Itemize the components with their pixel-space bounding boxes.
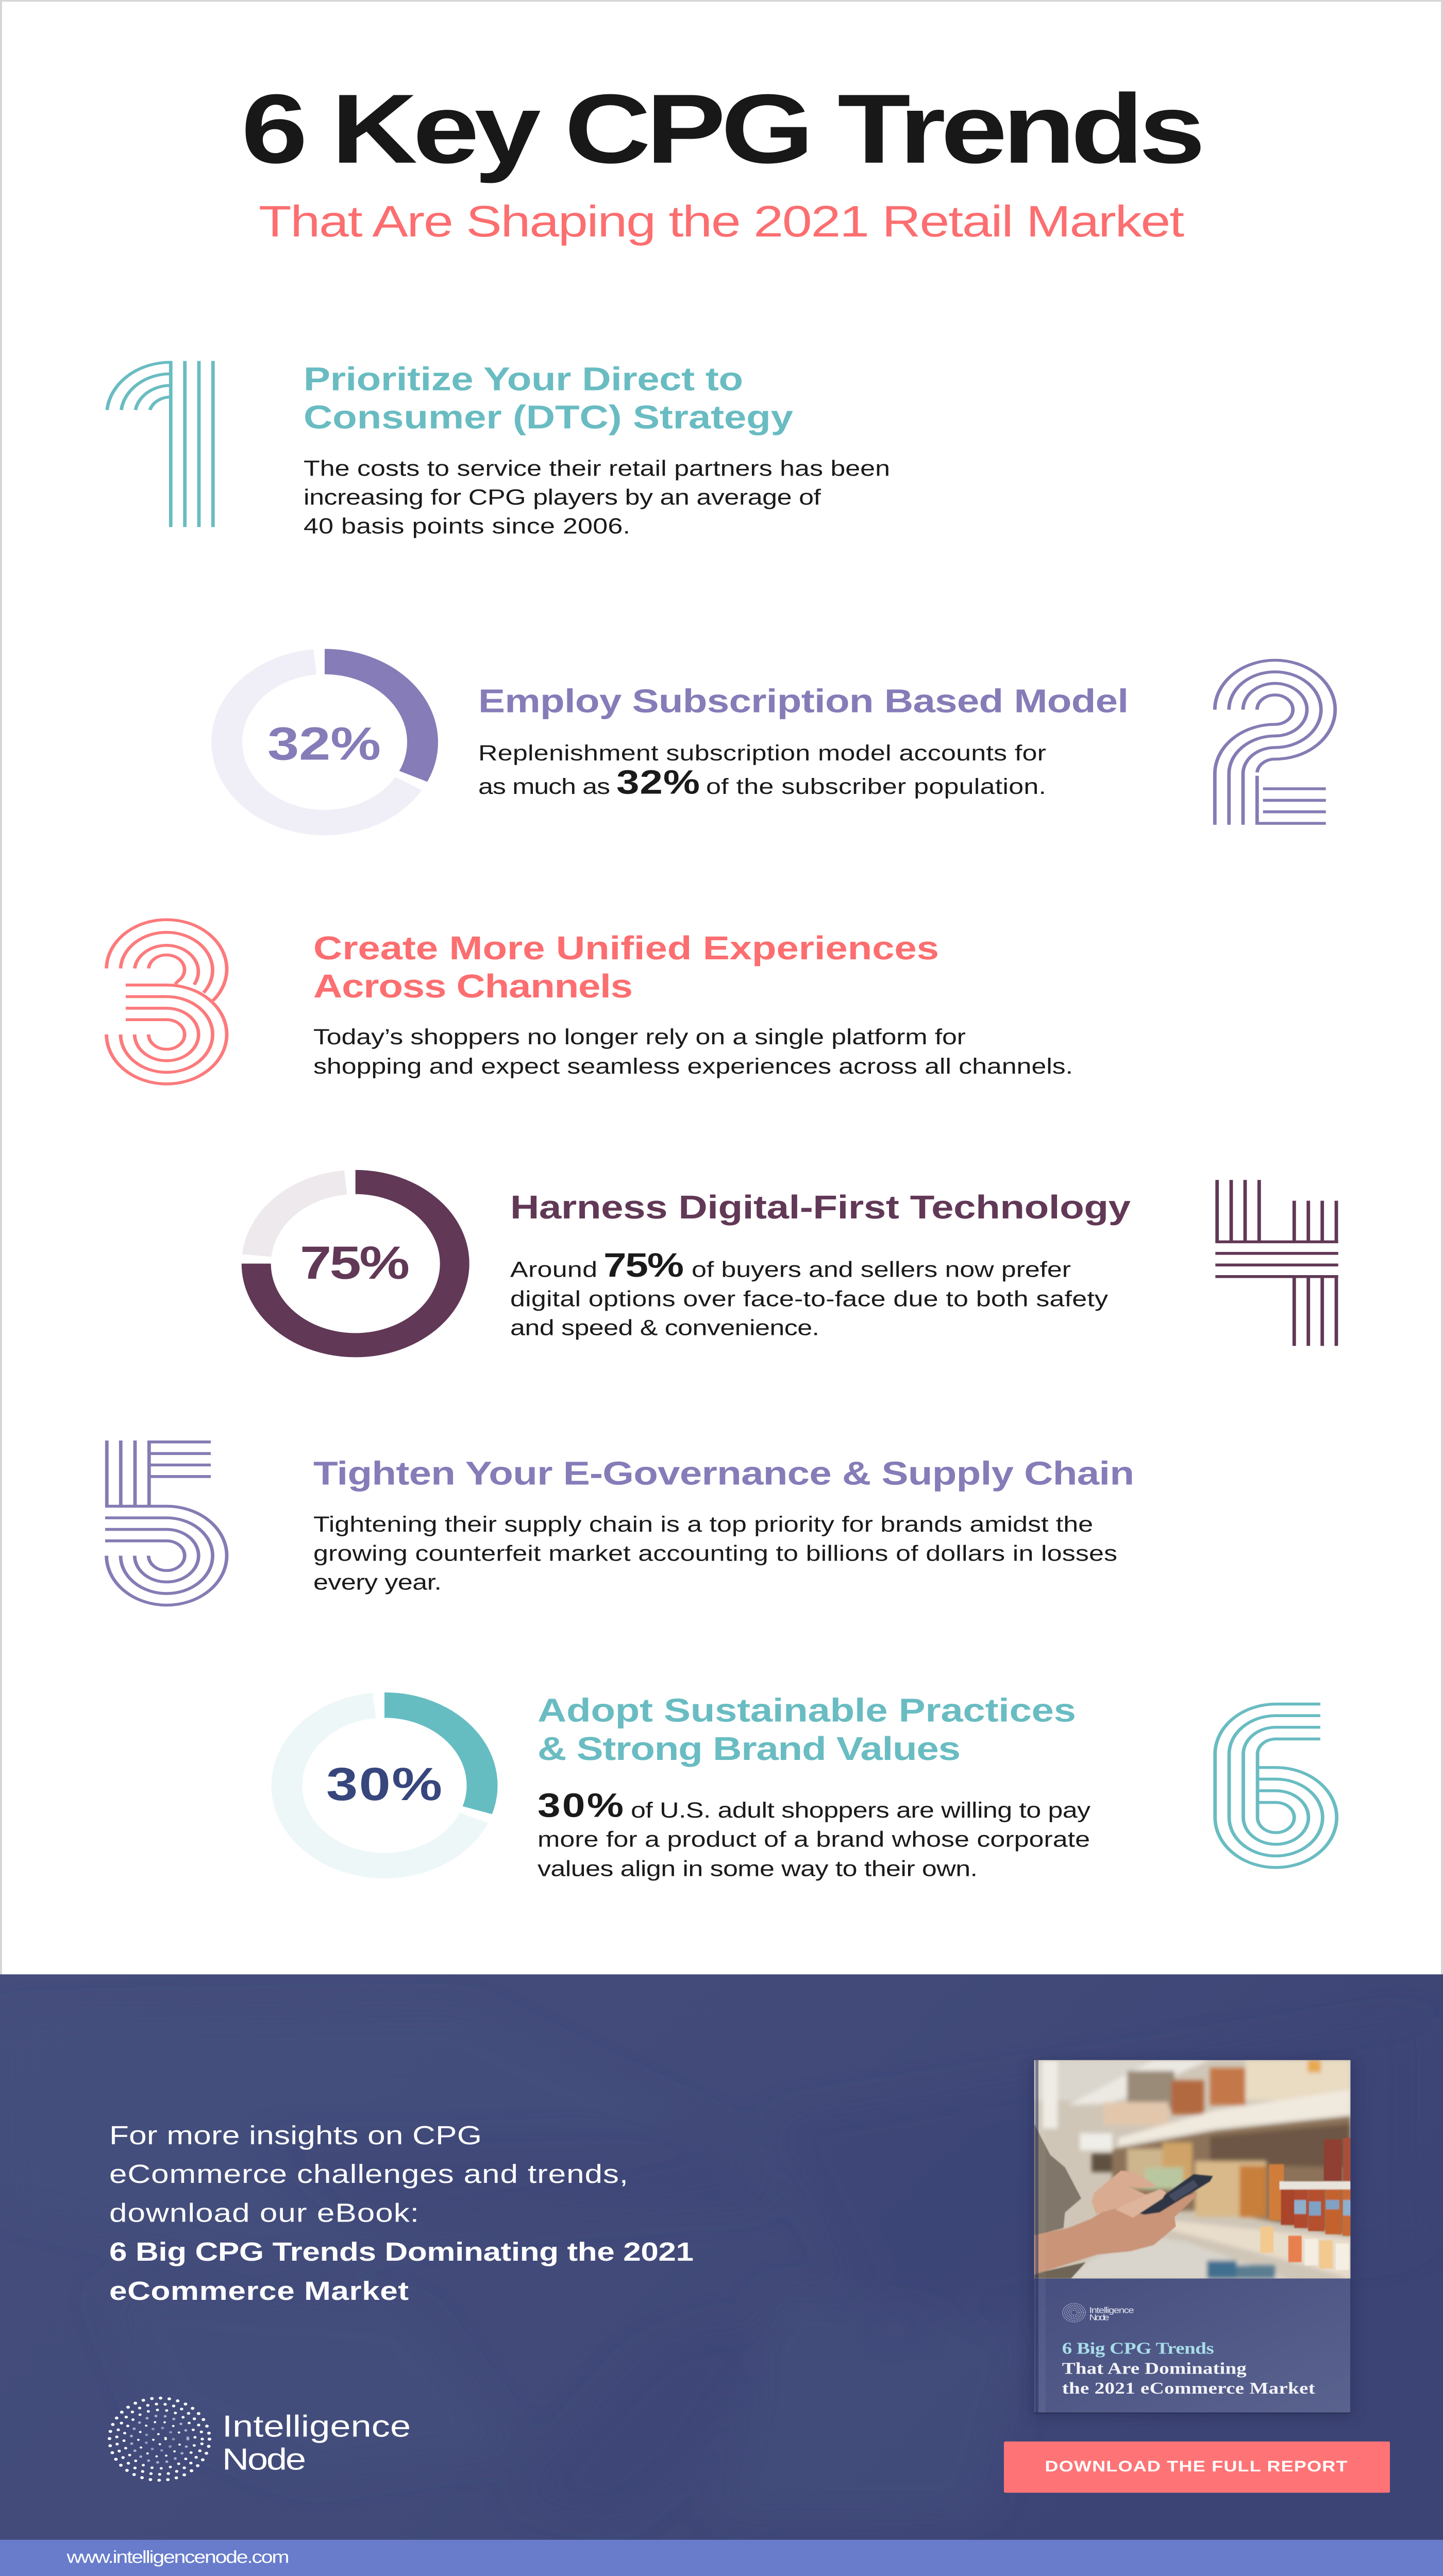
body: trend 6 — [538, 1786, 1090, 1881]
panel: trend 1 — [107, 360, 890, 538]
body: trend 3: shopping and expect seamless experiences across all channels. — [313, 1054, 1073, 1079]
button: download the full report — [1004, 2442, 1390, 2493]
heading: trend 1: Prioritize Your Direct to — [304, 360, 743, 397]
icon: number 1 — [107, 361, 213, 527]
body: trend 4 — [510, 1246, 1108, 1340]
icon: number 4 — [1215, 1180, 1338, 1346]
ebook lower panel — [1034, 2060, 1350, 2414]
heading: trend 3: Create More Unified Experiences — [313, 929, 939, 967]
heading: trend 1 — [304, 360, 793, 435]
panel: trend 5 — [105, 1440, 1134, 1605]
heading: trend 3: Across Channels — [313, 967, 633, 1005]
body: trend 4: digital options over face-to-face due to both safety — [510, 1287, 1108, 1311]
body: trend 6: of U.S. adult shoppers are willing to pay — [631, 1798, 1090, 1823]
heading: trend 6: & Strong Brand Values — [538, 1730, 961, 1767]
panel: trend 2 — [227, 660, 1335, 825]
logo: Intelligence Node — [109, 2398, 411, 2480]
donut chart: 32% — [227, 662, 423, 823]
body: trend 2: of the subscriber population. — [706, 774, 1046, 799]
ebook title — [1062, 2340, 1315, 2397]
body: trend 1 — [304, 456, 890, 538]
body: trend 4: of buyers and sellers now prefer — [692, 1258, 1071, 1282]
body: trend 3: Today’s shoppers no longer rely on a single platform for — [313, 1025, 966, 1049]
body: trend 5 — [313, 1512, 1117, 1595]
donut chart: 75% — [256, 1182, 455, 1345]
body: trend 3 — [313, 1025, 1073, 1079]
title: 6 Key CPG Trends — [241, 74, 1205, 184]
body: trend 1: The costs to service their retail partners has been — [304, 456, 890, 481]
logo: Intelligence Node: Node — [222, 2443, 306, 2477]
subtitle: That Are Shaping the 2021 Retail Market — [259, 197, 1184, 246]
panel: trend 4 — [256, 1180, 1338, 1346]
intro text: eCommerce Market — [109, 2277, 409, 2306]
icon: number 2 — [1215, 660, 1335, 825]
body: trend 4: and speed & convenience. — [510, 1315, 819, 1340]
donut chart: 32%: 32% — [267, 718, 381, 770]
button: download the full report: DOWNLOAD THE FULL REPORT — [1045, 2458, 1347, 2475]
intro text: eCommerce challenges and trends, — [109, 2160, 628, 2189]
heading: trend 5: Tighten Your E-Governance & Supply Chain — [313, 1454, 1134, 1492]
intro text — [109, 2121, 694, 2306]
body: trend 4: Around — [510, 1258, 597, 1282]
ebook title: the 2021 eCommerce Market — [1062, 2379, 1315, 2397]
body: trend 5: growing counterfeit market accounting to billions of dollars in losses — [313, 1541, 1117, 1566]
heading: trend 1: Consumer (DTC) Strategy — [304, 398, 793, 435]
heading: trend 6 — [538, 1691, 1076, 1767]
body: trend 5: every year. — [313, 1570, 442, 1595]
icon: number 6 — [1215, 1704, 1337, 1868]
body: trend 2: Replenishment subscription model accounts for — [478, 741, 1046, 766]
intro text: For more insights on CPG — [109, 2121, 482, 2150]
intro text: 6 Big CPG Trends Dominating the 2021 — [109, 2238, 694, 2267]
panel: trend 3 — [107, 920, 1073, 1084]
ebook title: 6 Big CPG Trends — [1062, 2340, 1214, 2358]
body: trend 6: 30% — [538, 1786, 624, 1824]
ebook cover — [1032, 2060, 1353, 2417]
panel: download footer — [0, 1974, 1443, 2576]
body: trend 6: more for a product of a brand whose corporate — [538, 1827, 1090, 1852]
donut chart: 30% — [287, 1705, 482, 1866]
body: trend 1: 40 basis points since 2006. — [304, 514, 630, 538]
ebook photo — [1034, 2060, 1352, 2279]
body: trend 6: values align in some way to their own. — [538, 1857, 978, 1881]
body: trend 2 — [478, 741, 1046, 801]
website bar — [0, 2540, 1443, 2576]
body: trend 1: increasing for CPG players by an average of — [304, 485, 821, 510]
icon: number 3 — [107, 920, 227, 1084]
ebook title: That Are Dominating — [1062, 2360, 1247, 2378]
ebook logo: Node — [1089, 2313, 1109, 2323]
body: trend 4: 75% — [603, 1246, 684, 1284]
panel: trend 6 — [287, 1691, 1337, 1881]
heading: trend 2: Employ Subscription Based Model — [478, 682, 1129, 719]
body: trend 5: Tightening their supply chain is a top priority for brands amidst the — [313, 1512, 1093, 1537]
heading: trend 6: Adopt Sustainable Practices — [538, 1691, 1076, 1728]
website bar: www.intelligencenode.com — [66, 2547, 290, 2567]
heading: trend 3 — [313, 929, 939, 1005]
body: trend 2: as much as — [478, 774, 610, 799]
body: trend 2: 32% — [616, 763, 700, 801]
intro text: download our eBook: — [109, 2198, 419, 2228]
ebook logo — [1063, 2303, 1134, 2323]
icon: number 5 — [105, 1440, 227, 1605]
logo: Intelligence Node: Intelligence — [222, 2410, 411, 2444]
donut chart: 30%: 30% — [326, 1758, 442, 1810]
ebook logo: Intelligence — [1089, 2306, 1134, 2315]
heading: trend 4: Harness Digital-First Technology — [510, 1189, 1131, 1226]
donut chart: 75%: 75% — [300, 1236, 410, 1289]
